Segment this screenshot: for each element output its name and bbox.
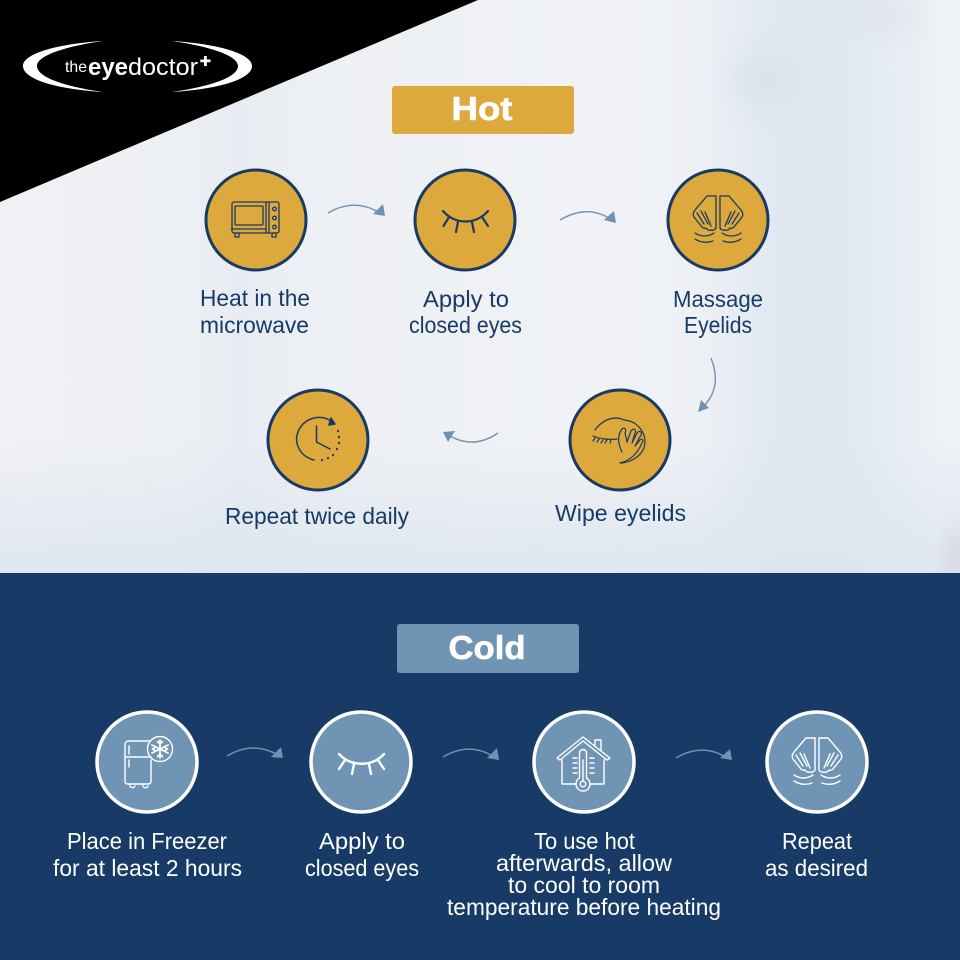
arrow: heat to apply — [328, 204, 385, 216]
logo: the eye doctor — [23, 41, 252, 92]
label: apply to closed eyes: closed eyes — [305, 855, 419, 881]
step: place in freezer — [53, 712, 242, 881]
step: apply to closed eyes — [409, 170, 522, 338]
label: place in freezer: for at least 2 hours — [53, 855, 242, 881]
icon: massaging hands — [792, 738, 842, 784]
heading: Hot — [392, 86, 574, 134]
label: repeat twice daily: Repeat twice daily — [225, 503, 409, 529]
heading: Cold — [397, 624, 579, 673]
logo: the eye doctor: the — [65, 59, 87, 76]
logo: the eye doctor: doctor — [128, 54, 198, 81]
label: place in freezer — [53, 828, 242, 881]
label: heat in the microwave: Heat in the — [200, 285, 310, 311]
heading: Cold: Cold — [448, 629, 526, 666]
arrow: wipe to repeat — [443, 431, 498, 442]
label: apply to closed eyes — [409, 286, 522, 338]
panel: cold section — [0, 573, 960, 960]
icon: microwave — [232, 202, 279, 237]
heading: Hot: Hot — [452, 90, 513, 127]
arrow: massage to wipe — [698, 358, 715, 412]
icon: massaging hands — [693, 196, 743, 242]
icon: closed eye — [443, 211, 488, 232]
label: apply to closed eyes: Apply to — [423, 286, 509, 312]
label: massage eyelids: Eyelids — [684, 312, 752, 338]
label: to use hot afterwards: temperature before heating — [447, 894, 721, 920]
label: wipe eyelids: Wipe eyelids — [555, 500, 686, 526]
label: apply to closed eyes — [305, 828, 419, 881]
label: to use hot afterwards: To use hot — [534, 828, 636, 854]
label: repeat as desired: Repeat — [782, 828, 853, 854]
arrow: freezer to apply — [227, 747, 283, 758]
label: to use hot afterwards: to cool to room — [508, 872, 660, 898]
step: wipe eyelids — [555, 390, 686, 526]
label: massage eyelids: Massage — [673, 286, 763, 312]
icon: house with thermometer — [557, 737, 610, 791]
arrow: apply to cool — [443, 748, 499, 760]
step: heat in the microwave — [200, 170, 310, 338]
label: apply to closed eyes: Apply to — [319, 828, 405, 854]
step: repeat twice daily — [225, 390, 409, 529]
label: massage eyelids — [673, 286, 763, 338]
step: apply to closed eyes — [305, 712, 419, 881]
label: repeat as desired: as desired — [765, 855, 868, 881]
arrow: apply to massage — [560, 211, 616, 223]
label: apply to closed eyes: closed eyes — [409, 312, 522, 338]
icon: hand wiping eyelid — [593, 418, 645, 463]
label: to use hot afterwards: afterwards, allow — [496, 850, 672, 876]
icon: closed eye — [339, 754, 384, 774]
label: heat in the microwave — [200, 285, 310, 338]
label: to use hot afterwards — [447, 828, 721, 920]
label: repeat as desired — [765, 828, 868, 881]
icon: clock with dotted return — [297, 417, 339, 460]
step: cool to room temperature — [447, 712, 721, 920]
label: heat in the microwave: microwave — [200, 312, 309, 338]
black corner banner — [0, 0, 478, 202]
label: place in freezer: Place in Freezer — [67, 828, 227, 854]
step: massage eyelids — [668, 170, 768, 338]
step: repeat as desired — [765, 712, 868, 881]
logo: the eye doctor: eye — [88, 54, 128, 81]
arrow: cool to repeat — [676, 749, 732, 760]
background: blurred light panel — [0, 0, 960, 581]
icon: fridge with snowflake — [125, 736, 172, 788]
